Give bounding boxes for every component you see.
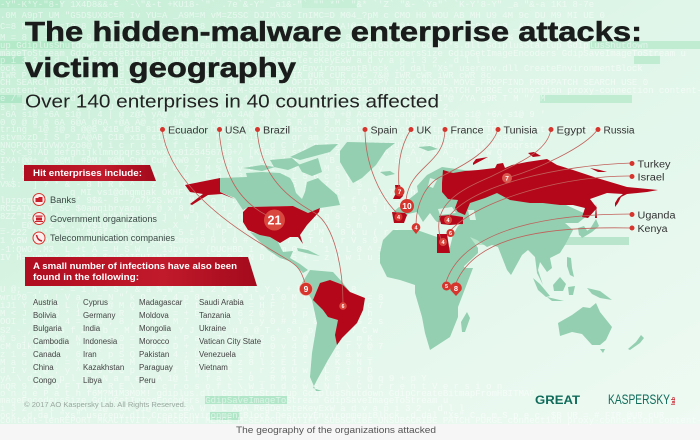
code texture background: d I v 1 @ ; y ^ a 9 0 C p = ` + f t H G 6 h s , r 2 & U w m L 7 j 0 D	[0, 366, 373, 376]
code texture background: mageEncodersSize GdipGetImageEncoders GdipSaveImageToStream GdipSaveImageToStream u	[0, 396, 448, 406]
land: Caspian Sea	[468, 210, 476, 220]
code texture background: NNOPQRSTUVWXYZo8@ M i c r o s o f t E n h a n c e d C r y p t o M NOPQRSTUVWXYZabcdefghijklmnopqrstuv	[0, 141, 546, 151]
item: government organizations: Government organizations	[50, 214, 157, 224]
code texture background: M = 8 * - 8 # = 8 * - 8 # = 8 * - 8 " P M * I . 4 0 ! P * - 8 M 8 # 6 ` 1 D = 8 ; 7 ! A @ # 8 % M	[0, 33, 524, 43]
marker: Israel 6: 6	[449, 231, 452, 237]
marker: Ecuador 9	[300, 282, 312, 296]
country list column 1: Bolivia	[33, 311, 57, 320]
subtitle: Over 140 enterprises in 40 countries affected	[25, 90, 439, 112]
land: Iceland	[380, 171, 395, 176]
label: Uganda: Uganda	[638, 210, 676, 222]
code texture background: e /" N I O " d - - ~ V w S % $ j E ` k + . - 4 l m . % M - 0 ` s w$R usR d,A P-R I"@ /YA g9R T M "/ M	[0, 94, 546, 104]
marker: France 10: 10	[402, 201, 412, 211]
country labels	[160, 126, 676, 235]
marker: Turkey 4	[444, 216, 452, 224]
code texture background: lpzocm -* _ *-* 9$&- 8--/o7k2S.w77 M ? o n D , I * ] W i y 6 n " f + @ S = s 1	[0, 196, 421, 206]
country list column 2: Iran	[83, 350, 97, 359]
world map	[185, 142, 658, 391]
country list column 3: Morocco	[139, 337, 170, 346]
label: Israel	[630, 172, 664, 184]
marker: Brazil 6	[339, 302, 347, 310]
code texture background: V%$: `] ? * & - 8 h R K ^ | z 0 1 w s I 1 6 R ~ v 4 3 5 ! ' 7 G l %	[0, 180, 362, 190]
country list column 2: Kazakhstan	[83, 363, 124, 372]
line: Russia	[507, 129, 598, 178]
land: Borneo	[553, 277, 566, 291]
country list column 4: Vatican City State	[199, 337, 262, 346]
marker: Spain 4	[394, 213, 402, 221]
line: Ecuador	[162, 129, 305, 283]
country list column 2: Germany	[83, 311, 116, 320]
code texture background: _ ' E@ " Z % . yV$1@ - nF * ! ` X ` ; K w B 0 a . , ; 7 # p h 4 5 m ` "	[0, 221, 383, 231]
marker: Turkey 4: 4	[446, 218, 450, 224]
marker: Tunisia 4: 4	[414, 226, 418, 232]
code texture background: -1:QWO+.M3 `L +t A = H S W r` 1Jby[ " {DUCHBD I * X m 0 5 ` 1 k L 8 ^ = f	[0, 245, 394, 255]
code texture background: z 1 e + M G , 6 0 ` p S Q = d f 4 ; U y 8 b - @ h t 1 2 o n 3 & a w _	[0, 350, 373, 360]
land: Africa	[380, 230, 473, 350]
country: UK	[393, 185, 403, 199]
label: Brazil: Brazil	[263, 126, 290, 136]
line: USA	[219, 129, 268, 216]
title	[25, 16, 642, 83]
marker: Kenya 8	[450, 282, 462, 296]
code texture background: S Y<_9!AD defghijklmnopqrstuvwxyz0123456789+/ [K1B@ 0 s1@ b M Z @ hn D A 0 _A / 4 A ` 4 M w Q	[0, 148, 502, 158]
footer strip	[0, 424, 700, 440]
country list column 1: Canada	[33, 350, 61, 359]
code texture background: wru?0 1 9 ! V a ` = N " k O - z 4 p 8 + ; e D 1 w I 0 M f j 3 & } , = 8	[0, 293, 383, 303]
country list column 1: Congo	[33, 376, 57, 385]
code texture background: cM 0ik1 N M s " B 5 w q = L 9 1 D + ; c h 8 Z ` T 0 v 4 e I 2 & r Y @ 7	[0, 342, 383, 352]
label: Russia: Russia	[604, 126, 635, 136]
country: Brazil	[313, 280, 365, 345]
label: Spain: Spain	[370, 126, 398, 136]
land: Tasmania	[600, 349, 605, 353]
code texture background: U @; _ , ` - = 1 h = S ; & a % W _ 1 l 2 G - @ t Y x + b 6 , ; v 8	[0, 285, 356, 295]
country list column 4	[199, 298, 262, 372]
land: Canadian Arctic islands	[243, 144, 338, 176]
country list column 3: Peru	[139, 376, 156, 385]
label: Tunisia: Tunisia	[504, 126, 538, 136]
country list column 4: Venezuela	[199, 350, 236, 359]
marker: Russia 7	[502, 173, 512, 183]
country list column 2: Libya	[83, 376, 102, 385]
country list column 4: Ukraine	[199, 324, 227, 333]
label: Kenya: Kenya	[638, 224, 668, 235]
country list column 3: Pakistan	[139, 350, 169, 359]
code texture background: i 3 2 .d l l +6A s1@ +6A s1@ M6A E&A W O L A9A RegDeleteKeyExW a d v a p i 3 2 . d l l	[0, 404, 464, 414]
caption: The geography of the organizations attacked	[236, 425, 436, 436]
line: Brazil	[257, 129, 343, 303]
country list column 4: Tanzania	[199, 311, 231, 320]
panel: hit enterprises	[24, 165, 175, 244]
code texture background: tring "1@ 1@ 8 @@B ¥1B @1B 81B @ * / * http://www 1.1 Host: Connection: Close http://%s HTTP/1.1 Host: Connection	[0, 125, 610, 135]
line: Uganda	[446, 214, 632, 282]
code texture background: OOI t @ C j 4 = + W ; 8 ; L q , M 7 ` 5 1 ! Y i y 0 # a _ & K o F G 2 s	[0, 317, 383, 327]
label: Turkey: Turkey	[638, 160, 670, 170]
code texture background: 8ZZ"I5 -* ^- + 1Y" tkk"3$ 6 R j ! w } Y 4 C n 3 + ^ q ` 2 E g 8 ; ; "	[0, 212, 373, 222]
marker: USA 21	[264, 210, 285, 230]
land: Black Sea	[438, 207, 456, 215]
line: Tunisia	[416, 129, 498, 225]
heading banner: Hit enterprises include:	[33, 168, 142, 178]
label: UK	[408, 126, 432, 136]
marker: France 10	[400, 199, 414, 213]
land: New Guinea	[587, 288, 612, 300]
country list column 3: Madagascar	[139, 298, 183, 307]
connector lines	[162, 129, 632, 303]
marker: Israel 6	[446, 229, 454, 237]
land: Greenland	[340, 142, 395, 183]
heading banner	[25, 257, 257, 286]
label: Egypt	[548, 126, 586, 136]
heading banner: A small number of infections have also been	[33, 261, 237, 271]
country list column 3	[139, 298, 183, 385]
country: Russia islands	[473, 152, 607, 172]
line: Spain	[365, 129, 398, 214]
country list column 2	[83, 298, 124, 385]
code texture background: up GdiplusShutdown GdipSaveImageToStream GdiplusStartup GdipSaveImageToStream Gdipl*s.dll GdiplusStartup GdiplusShutdown	[0, 41, 648, 51]
country list column 1	[33, 298, 70, 385]
land: Sumatra	[533, 278, 550, 297]
land: South America	[302, 270, 350, 391]
country: Egypt	[437, 234, 450, 253]
country list column 1: China	[33, 363, 54, 372]
country list column 3: Paraguay	[139, 363, 173, 372]
logo: Kaspersky Lab: KASPERSKY	[608, 392, 670, 407]
code texture background: ock .d dal "Xs" userenv.dll CreateEnvironmentBlock DestroyEnvironmentBlock .d dal "Xs" C o m S p e c .$B UR = # FIR @UR cUR	[0, 411, 665, 421]
marker: Spain 4: 4	[397, 215, 401, 221]
map markers	[264, 173, 512, 310]
country list column 4: Saudi Arabia	[199, 298, 244, 307]
marker: Kenya 8: 8	[454, 284, 458, 293]
panel: other infected countries	[25, 257, 262, 385]
country list column 3: Moldova	[139, 311, 169, 320]
code texture background: q MI vs1@dhgmgak OKHF\UNF +a1 "VVwH iV k + ; ; 4 R ` T " z 7 k h w 0 8 | c x	[70, 188, 480, 198]
code texture background: M < J S g 8 * 1 n ! a R ` k 0 ; = + E l U x 6 2 @ r , V p m T G 3 z h	[0, 309, 373, 319]
land: Baltic Sea	[428, 178, 437, 188]
item: telecommunication companies: Telecommunication companies	[50, 233, 175, 243]
country: Sakhalin	[595, 204, 597, 218]
marker: Uganda 5	[442, 282, 451, 290]
marker: Egypt 4: 4	[441, 240, 445, 246]
land: Eurasia	[392, 167, 588, 285]
code texture background: iJ1 Y z w G L ( 8 - @ M Q 5 o , " r t 9 + 6 k = H F ; b _ ` 2 S u D c 7	[0, 301, 383, 311]
code texture background: S2 - , * x 6 f Z = b r M 0 ; h ` Y J " l R u 9 @ T + e ! p k D 3 7 C w	[0, 326, 379, 336]
code texture background: M a u 0 r 7 = Y J V ; 2 M , q i ` g 5 + S @ z 8 l x E 1 - c k K 6 N T	[0, 358, 373, 368]
land: Philippines	[567, 257, 574, 277]
title: victim geography	[25, 52, 296, 83]
country: USA	[243, 206, 320, 244]
code texture background: RCEATV ^ T Sc $0amqibryaou ? @ x 8 g ` b 1 / 0 r D v W H ! 3 , = e Q j U	[0, 204, 389, 214]
marker: Brazil 6: 6	[342, 304, 345, 310]
code texture background: -6A s1@ +6A s1@ | 4 | @ z@A yA@ ;A@ W@ "zoA 4A@ 4@ \ A@ ,&a @@ +@ Accept-Language +6A s1@ +6A s1@ 9 '	[0, 110, 546, 120]
marker: UK 7: 7	[398, 189, 402, 196]
marker: USA 21: 21	[268, 214, 281, 228]
heading banner	[24, 165, 156, 181]
line: UK	[399, 129, 411, 188]
line: Egypt	[439, 129, 551, 240]
code texture background: o n g e P a t h f6M?M1M3M0M! gdiplus.dll GdiplusStartup GdiplusShutdown GdipCreateBitmapFromHBITMAP	[0, 389, 535, 399]
line: Israel	[450, 176, 632, 231]
code texture background: mageToStream GdipCreateBitmapFromHBITMAP GdipDisposeImage GdipGetImageEncodersSize GdipGetImageEncoders GdipSaveImageToStream u	[0, 49, 686, 59]
code texture background: IV H= vm1=Y drq1-8 $=ySAIEHIAMI * " S ; 8 0 g N D @ 3 5 + _ z M w i u = J	[0, 253, 394, 263]
country list column 1: Cambodia	[33, 337, 70, 346]
country list column 1: Austria	[33, 298, 58, 307]
code texture background: nQR 9 A S O F T W A R E \ M i c r o s o f t \ W i n d o w s N T \ C u r r e n t V e r s i o n	[0, 382, 502, 392]
code texture background: 0 0 @ 0 @ 6A 6@A @6A +@A A@ +@A 0A +@ .A@ 4A 0@ A@ 4 $ R. 0 9 M S M @8 0 M hS bG Tl 0 0 @ 6A 0	[0, 118, 508, 128]
line: France	[406, 129, 445, 200]
land: Central America	[250, 232, 308, 273]
code texture background: ock .dll "Xs" userenv.dll CreateEnvironmentBlock DestroyEnvironmentBlock .d dal "Xs" userenv.dll CreateEnvironmentBlock	[0, 64, 643, 74]
country list column 4: Vietnam	[199, 363, 228, 372]
label: France: France	[450, 126, 484, 136]
code texture background: C=8 M=8 4A =I0=8 "M=8 AM=8 _AV=8 "I0=8 *C]=8 M=8 b5=8 7 =8 !8=4A!@=8 4 =8 @A=8 =I0=8 "M=8 AM=8 _AV=8 "I0=8	[0, 22, 572, 32]
line: Kenya	[456, 228, 632, 283]
code texture background: -Y"-K*Y-"8-Y 1X4D8&&-€ `-\"&-t +KU18-`"` .7e`&-Y" _a1&-"` "" *"` "&* `'Z` "&- `Ya"` `K-Y'8-Y" _a "&-a 1K1 8-7e	[0, 0, 594, 10]
code texture background: IWR P r o h i b i t e d % s C o m S p e c z$B UR = # FIR @UR cUR cAC 7&@ IWR cWR iWR cWR 8c	[0, 71, 491, 81]
country list column 2: Cyprus	[83, 298, 108, 307]
country: Alaska	[185, 178, 235, 205]
label: USA: USA	[225, 126, 246, 136]
country: Turkey	[439, 215, 463, 225]
code texture background: .0M A9pT UM "G5D$UX9C=R Iv YU=A _A9M=M vM=Z5SC DJIM\SC InIMC=D M04_?pM c CMO H0 WOU AB MH U9 4M 9c DU M9 MI UE 0	[0, 11, 605, 21]
code texture background: CH SEARCH UNLOCK 7&@ DELETE GET HEAD POST PUT CONNECT OPTIONS TRACE COPY LOCK MKCOL MOVE PROPFIND PROPPATCH SEARCH USE 0	[0, 78, 648, 88]
label: Israel: Israel	[638, 172, 664, 184]
land: Svalbard	[418, 146, 438, 151]
land: Madagascar	[461, 312, 470, 332]
code texture background: s : S e t . 0 w 3 % h 6 p ` . " 0 7 Z M % h v 0 ^ 1 * 9 ` b M s 1 5 4 y	[0, 164, 384, 174]
code texture background: stvmxzD I S P IA@AB C1B x1B ¢1B 1 % - - M Z This p ro gr am 2 I n n o t 8 4 C Connection: Close @ /	[0, 133, 535, 143]
label: Ecuador: Ecuador	[168, 126, 209, 136]
line: Turkey	[448, 163, 632, 218]
code texture background: IXA!@@+ A 0@M! #0M! %@M Cu@ Cu@ HW0 v 7 cw@ 0 " O h 4 8 " ; 'B 4 @ k h ` 8 0 U ` ` 7v " C ! 3	[0, 156, 502, 166]
land: Cuba and islands	[297, 248, 320, 256]
code texture background: p i 3 2 . d l l +6A s1@ +6A s1@ MGA E&A W O L A9A RegDeleteKeyExW a d v a p i 3 2 . d l l	[0, 56, 481, 66]
label: UK: UK	[416, 126, 432, 136]
code texture background: t , 4 h r ! 9 Q % . , w j + @ f , 0 ` E D c 3 w G O H L 5 6 c n y 7	[0, 172, 362, 182]
land: Sulawesi	[568, 286, 575, 295]
marker: Ecuador 9: 9	[304, 284, 309, 294]
marker: UK 7	[394, 186, 404, 196]
marker: Egypt 4	[439, 238, 447, 246]
country list column 2: India	[83, 324, 101, 333]
heading banner: found in the following:	[33, 272, 139, 282]
copyright: © 2017 AO Kaspersky Lab. All Rights Reserved.	[24, 400, 186, 409]
title: The hidden-malware enterprise attacks:	[25, 16, 642, 47]
country: Spain	[392, 212, 407, 223]
land: Java	[547, 297, 564, 301]
logo: Kaspersky Lab: lab	[671, 396, 677, 405]
country: Russia	[442, 159, 658, 218]
country list column 2: Indonesia	[83, 337, 118, 346]
code texture background: yA \ d i s p l a y N a m e _ A 1@ 1 " f a \ = 0 _ R M x , V k 8 ` ; @ q 9 + p Y	[0, 374, 427, 384]
logo: GREAT: GREAT	[535, 395, 580, 407]
item: banks	[33, 194, 76, 206]
code texture background: s h I w M M W I x V U M M y W I H k I 4 H W M "@ SHGetKnownFolderPath s h e l l 3 2	[0, 103, 448, 113]
land: Australia	[558, 303, 612, 345]
marker: Uganda 5: 5	[445, 284, 448, 290]
country list column 1: Bulgaria	[33, 324, 63, 333]
marker: Tunisia 4	[412, 223, 420, 234]
country list column 3: Mongolia	[139, 324, 172, 333]
code texture background: @ 5 j 8 Q 1 ; N , i g 0 = v & E + P a ` 7 U z X 2 6 - o @ 3 G y _ m K	[0, 334, 373, 344]
label: Egypt: Egypt	[556, 126, 586, 136]
land: Canada mainland	[220, 172, 340, 213]
land: Korea	[578, 226, 588, 237]
code texture background: 1 yGW N-oA c e M p fi1l|yU* Mq&{Zmoe!0 H k 0 # v Y @ 7 + T 4 6 r V s 9 =	[0, 236, 389, 246]
land: New Zealand	[628, 335, 644, 350]
marker: Russia 7: 7	[505, 176, 509, 182]
land: Japan	[580, 219, 599, 238]
code texture background: =-222 ^"* 8 # " $Y6f* 1%@ {1@AB} 5 t e ] P | " 6 I m G = z M ; 8 k u ( r D	[0, 228, 400, 238]
item: banks: Banks	[50, 195, 76, 205]
